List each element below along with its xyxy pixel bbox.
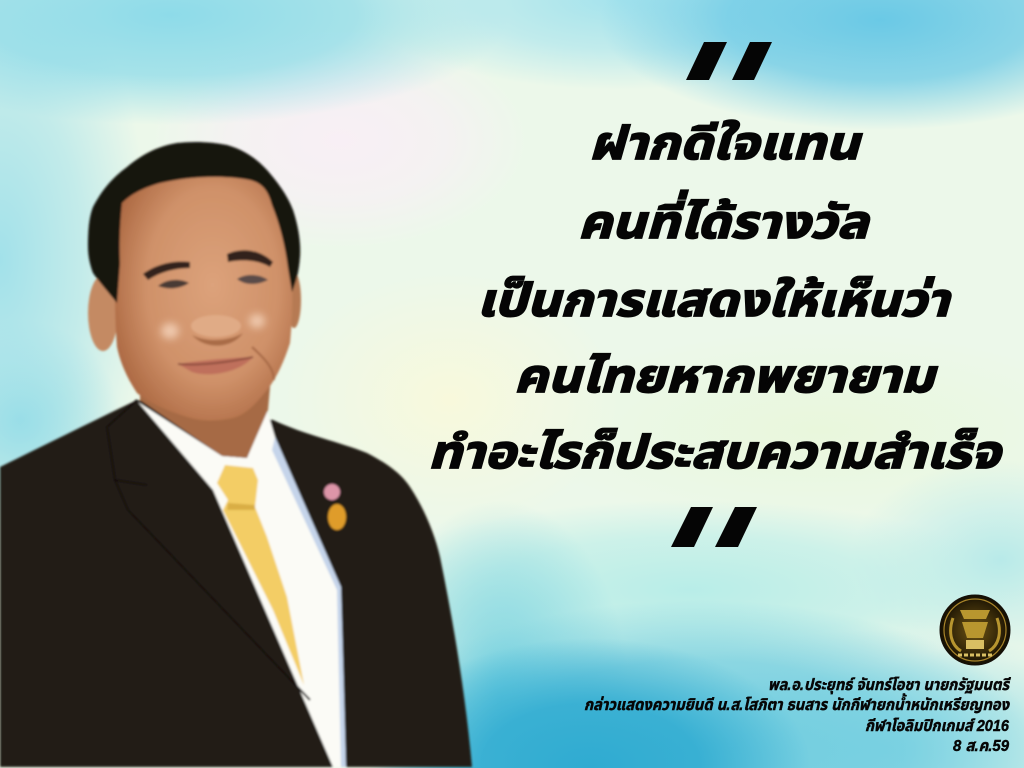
quote text: คนไทยหากพยายาม — [514, 350, 938, 402]
quote text: ทำอะไรก็ประสบความสำเร็จ — [428, 426, 1003, 478]
caption: 8 ส.ค.59 — [953, 738, 1009, 755]
shirt — [138, 402, 345, 767]
mouth — [178, 357, 253, 374]
nose — [191, 315, 241, 337]
person: portrait in suit — [0, 142, 472, 767]
shirt shadow — [272, 437, 346, 767]
ear left — [88, 275, 118, 351]
quote text: คนที่ได้รางวัล — [578, 190, 871, 248]
necktie — [217, 465, 304, 685]
nose shadow — [192, 333, 243, 346]
lapel lines — [107, 400, 310, 700]
neck — [140, 365, 272, 458]
caption — [584, 676, 1011, 755]
eyebrow right — [227, 250, 273, 267]
tie knot shading — [227, 503, 255, 510]
smile fold — [252, 347, 274, 380]
cheek highlights — [161, 314, 265, 339]
caption: กีฬาโอลิมปิกเกมส์ 2016 — [865, 717, 1009, 735]
quote text: ฝากดีใจแทน — [589, 117, 863, 169]
eye right — [237, 275, 268, 284]
face — [115, 160, 292, 421]
mouth line — [178, 357, 253, 365]
icon: government seal — [940, 595, 1010, 665]
pin: gold — [328, 504, 346, 530]
ear right — [287, 272, 301, 328]
pin: pink — [324, 484, 340, 500]
eye left — [158, 280, 189, 288]
quote mark: closing — [671, 507, 757, 547]
quote text: เป็นการแสดงให้เห็นว่า — [477, 274, 952, 326]
quote text — [428, 117, 1003, 478]
eyebrow left — [143, 262, 190, 280]
quote mark: opening — [686, 42, 772, 80]
suit jacket — [0, 400, 472, 767]
hair — [88, 142, 300, 303]
